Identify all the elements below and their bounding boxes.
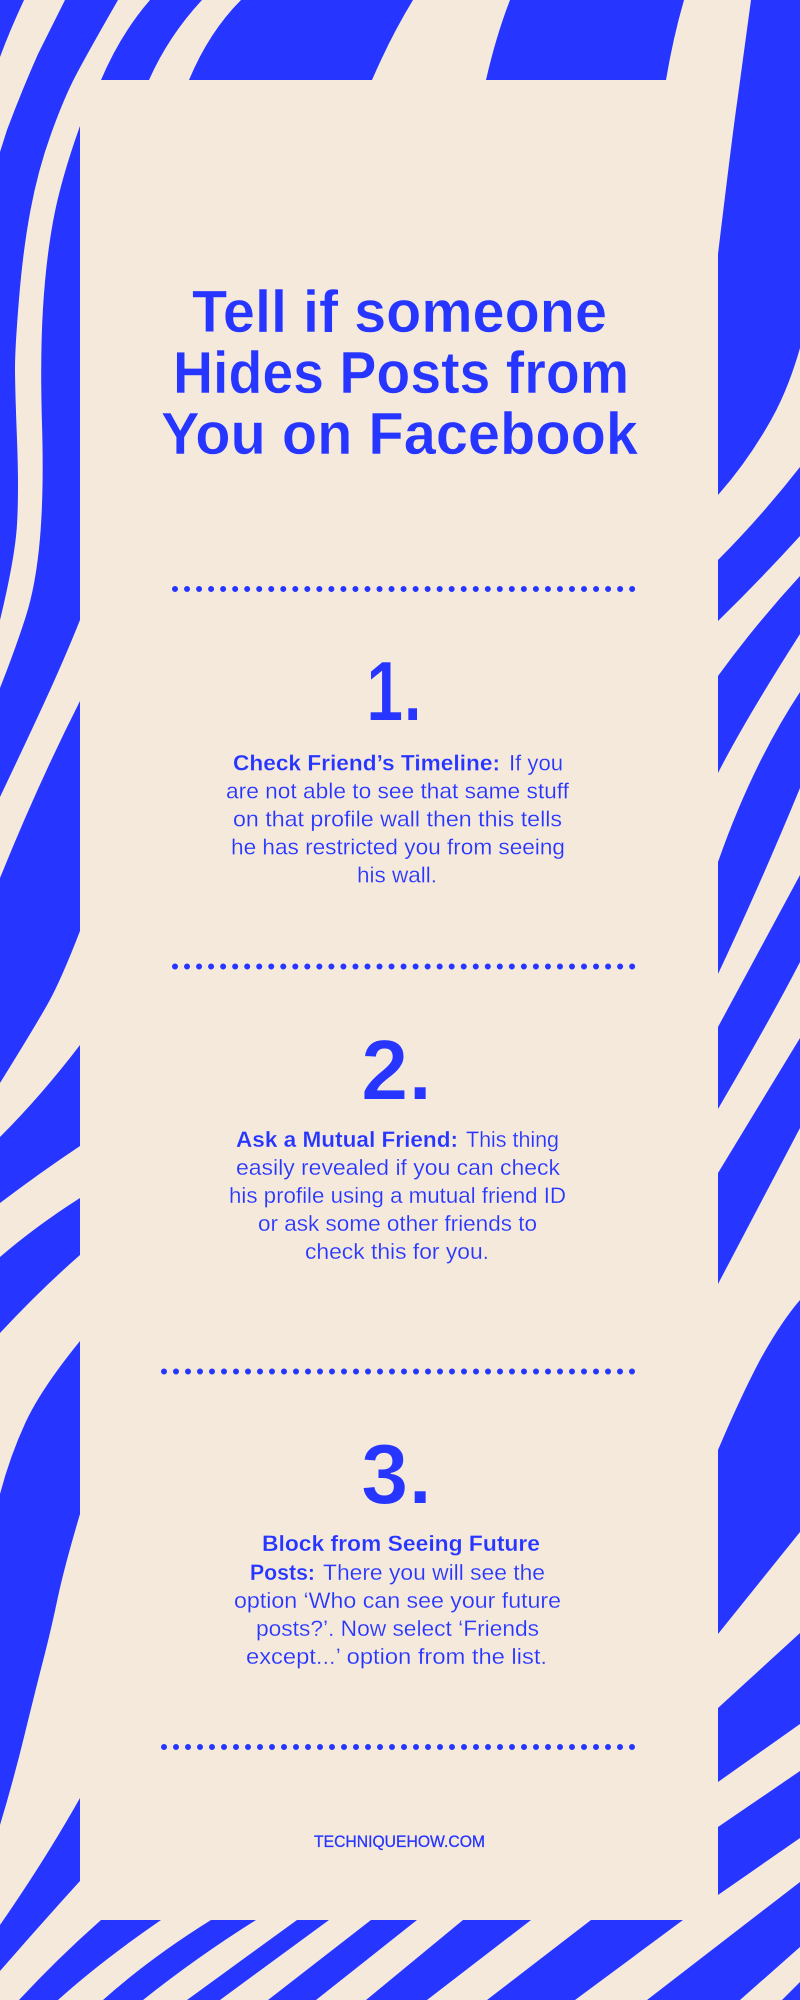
step 1 number: 1. (366, 644, 422, 740)
step 2 text: This thing (466, 1127, 559, 1152)
step 2 number: 2. (361, 1024, 432, 1118)
right wavy ribbons (647, 0, 800, 2000)
dotted divider 3 (164, 1368, 635, 1374)
step 3 text (234, 1531, 561, 1669)
title: Hides Posts from (173, 340, 629, 406)
step 2 text: Ask a Mutual Friend: (236, 1127, 458, 1152)
step 2 text: or ask some other friends to (258, 1211, 537, 1236)
step 2 text: check this for you. (305, 1239, 489, 1264)
step 2 text (229, 1127, 566, 1264)
step 3 text: option ‘Who can see your future (234, 1588, 561, 1613)
step 3 text: posts?’. Now select ‘Friends (256, 1616, 539, 1641)
step 3 text: Block from Seeing Future (262, 1531, 540, 1556)
left wavy ribbons (0, 0, 118, 1971)
step 1 text: on that profile wall then this tells (233, 806, 562, 832)
step 1 text (226, 750, 570, 888)
dotted divider 2 (175, 964, 635, 970)
step 1 text: his wall. (357, 862, 437, 888)
step 1 text: he has restricted you from seeing (231, 834, 565, 860)
dotted divider 4 (164, 1744, 635, 1750)
step 3 text: There you will see the (323, 1560, 545, 1585)
title: Tell if someone (192, 279, 607, 345)
step 2 text: his profile using a mutual friend ID (229, 1183, 566, 1208)
step 2 text: easily revealed if you can check (236, 1155, 561, 1180)
step 3 text: except...’ option from the list. (246, 1644, 547, 1669)
title (161, 279, 638, 467)
title: You on Facebook (161, 401, 638, 467)
step 1 text: Check Friend’s Timeline: (233, 750, 500, 776)
dotted divider 1 (175, 586, 635, 592)
step 3 number: 3. (361, 1428, 432, 1522)
step 1 text: If you (509, 750, 563, 776)
footer website: TECHNIQUEHOW.COM (314, 1832, 485, 1851)
top ribbons (101, 0, 684, 80)
bottom diagonal stripes (19, 1920, 683, 2000)
step 3 text: Posts: (250, 1560, 315, 1585)
step 1 text: are not able to see that same stuff (226, 778, 570, 804)
